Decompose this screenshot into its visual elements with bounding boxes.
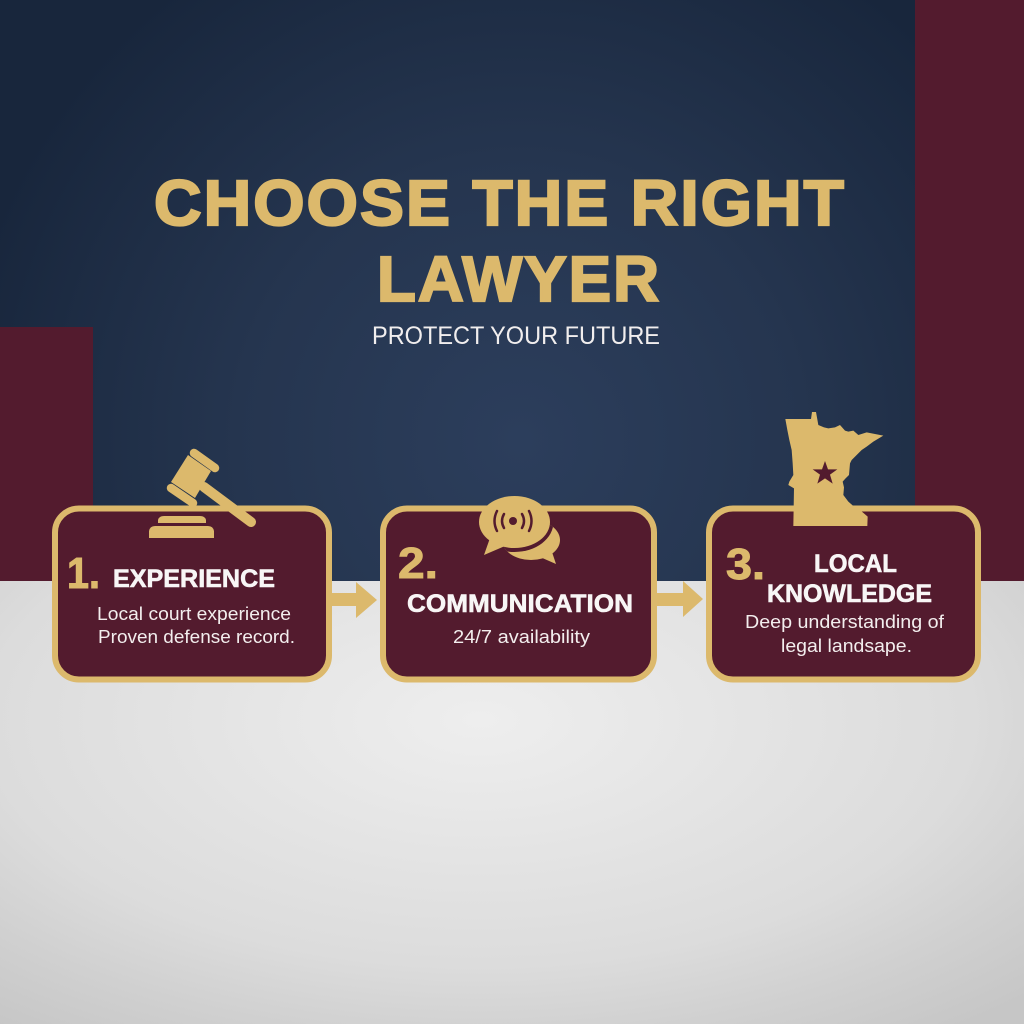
description: experience: Proven defense record.: [98, 627, 295, 647]
heading: local knowledge: [767, 550, 932, 608]
panel: communication: [383, 492, 654, 680]
title: CHOOSE THE RIGHT: [154, 167, 846, 239]
description: local knowledge: Deep understanding of: [745, 612, 945, 632]
navy upper background: [0, 0, 915, 581]
card: communication: [383, 508, 654, 680]
heading: communication: COMMUNICATION: [407, 590, 633, 618]
step number 1: 1.: [67, 549, 100, 598]
description: local knowledge: legal landsape.: [781, 636, 912, 656]
arrow: step 1 to step 2: [330, 582, 377, 618]
title: [154, 167, 846, 315]
card: experience: [55, 508, 329, 680]
description: local knowledge: [745, 612, 945, 656]
icon: speech bubbles: [476, 492, 560, 564]
light lower background: [0, 581, 1024, 1024]
title: LAWYER: [377, 243, 661, 315]
maroon left block: [0, 327, 93, 581]
icon: gavel: [149, 453, 251, 538]
description: experience: [97, 604, 295, 647]
step number 2: 2.: [398, 539, 438, 588]
panel: experience: [55, 453, 329, 680]
heading: experience: EXPERIENCE: [113, 565, 275, 593]
description: experience: Local court experience: [97, 604, 291, 624]
arrow: step 2 to step 3: [655, 581, 703, 617]
icon: Minnesota map: [785, 412, 883, 526]
heading: local knowledge: KNOWLEDGE: [767, 580, 932, 608]
description: communication: 24/7 availability: [453, 627, 590, 647]
panel: local knowledge: [709, 412, 978, 680]
maroon right block: [915, 0, 1024, 581]
subtitle: PROTECT YOUR FUTURE: [372, 322, 660, 350]
heading: local knowledge: LOCAL: [814, 550, 897, 578]
step number 3: 3.: [726, 540, 765, 589]
card: local knowledge: [709, 508, 978, 680]
